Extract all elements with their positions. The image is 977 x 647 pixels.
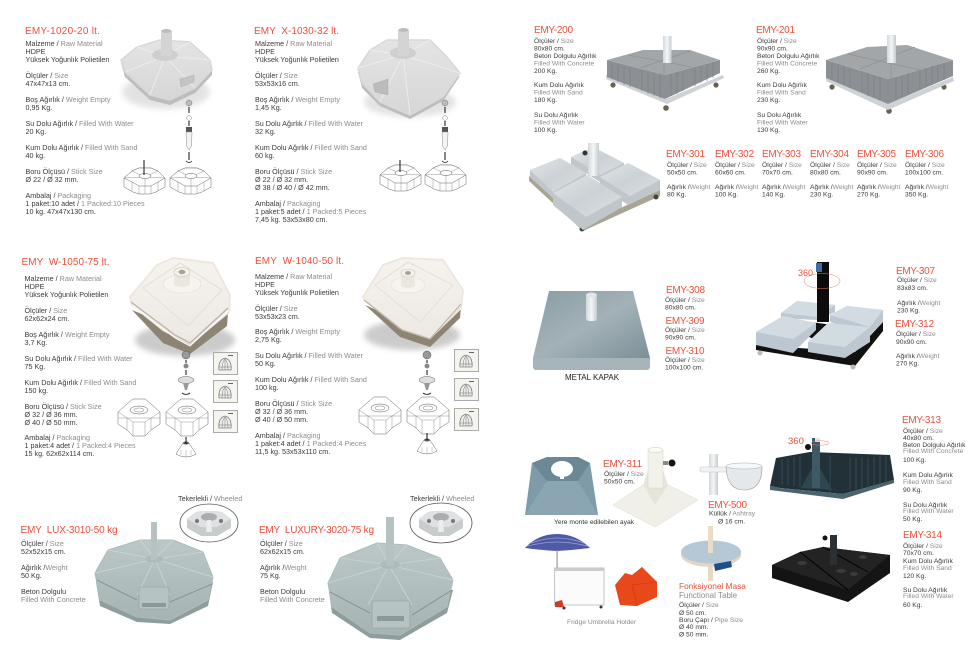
specs: EMY-1020: Malzeme / Raw Material bbox=[26, 39, 103, 48]
EMY-303: Ağırlık /Weight bbox=[762, 184, 806, 191]
specs: EMY-311: 50x50 cm. bbox=[604, 478, 635, 486]
specs: EMY-314: 120 Kg. bbox=[903, 573, 926, 580]
specs: EMY-200: 200 Kg. bbox=[534, 68, 557, 75]
heading: EMY W-1050: EMY W-1050-75 lt. bbox=[22, 257, 110, 268]
EMY-303: Ölçüler / Size bbox=[762, 161, 802, 169]
specs: EMY-307 and EMY-312: EMY-312 bbox=[895, 319, 934, 330]
heading: EMY-200: EMY-200 bbox=[534, 25, 573, 36]
EMY-301: Ağırlık /Weight bbox=[667, 184, 711, 191]
panel: EMY-201 bbox=[756, 25, 954, 134]
specs: EMY-1020: Ambalaj / Packaging bbox=[26, 191, 91, 200]
specs: EMY W-1040: Ø 32 / Ø 36 mm. bbox=[255, 407, 308, 416]
caption: metal cover: METAL KAPAK bbox=[565, 373, 620, 382]
product: floor mount plate bbox=[525, 457, 598, 515]
specs: EMY W-1040: Kum Dolu Ağırlık / Filled With Sand bbox=[255, 375, 367, 384]
specs: EMY-307 and EMY-312: 270 Kg. bbox=[896, 360, 919, 368]
specs: EMY-1020: Yüksek Yoğunlık Polietilen bbox=[26, 55, 109, 64]
specs: EMY-314: 60 Kg. bbox=[903, 602, 922, 609]
specs: EMY-308 to EMY-310: 100x100 cm. bbox=[665, 364, 703, 372]
EMY-302: 100 Kg. bbox=[715, 192, 738, 198]
specs: EMY-313: 50 Kg. bbox=[903, 516, 922, 523]
panel: EMY X-1030 bbox=[254, 26, 466, 224]
specs: EMY X-1030: 53x53x16 cm. bbox=[255, 79, 300, 88]
EMY-305: Ağırlık /Weight bbox=[857, 184, 901, 191]
EMY-305: Ölçüler / Size bbox=[857, 161, 897, 169]
specs: EMY X-1030: Su Dolu Ağırlık / Filled With Water bbox=[255, 119, 364, 128]
callout: wheeled base bbox=[410, 494, 474, 543]
assembly diagram: EMY X-1030 bbox=[380, 100, 466, 191]
EMY-303 bbox=[762, 149, 806, 198]
caption: fridge umbrella holder: Fridge Umbrella Holder bbox=[567, 619, 637, 626]
specs: EMY X-1030: 32 Kg. bbox=[255, 127, 276, 136]
product: metal cover bbox=[533, 291, 650, 370]
specs: EMY X-1030: 1 paket:5 adet / 1 Packed:5 Pieces bbox=[255, 207, 367, 216]
specs: EMY-308 to EMY-310: Ölçüler / Size bbox=[665, 326, 705, 334]
specs: EMY W-1050: Yüksek Yoğunlık Polietilen bbox=[24, 290, 108, 299]
specs: EMY LUX-3010: Filled With Concrete bbox=[21, 595, 86, 604]
product: dark base with side tube and 360 rotation bbox=[770, 436, 894, 499]
specs: EMY-308 to EMY-310: EMY-309 bbox=[666, 316, 705, 327]
specs: functional table: Ø 50 mm. bbox=[679, 632, 708, 638]
product: white base 50 lt bbox=[363, 258, 463, 350]
specs: EMY LUX-3010: Ağırlık /Weight bbox=[21, 563, 68, 572]
EMY-302: Ölçüler / Size bbox=[715, 161, 755, 169]
EMY-304: EMY-304 bbox=[810, 149, 849, 160]
panel: EMY-1020 bbox=[25, 26, 212, 216]
specs: EMY LUXURY-3020: Ölçüler / Size bbox=[260, 539, 303, 548]
EMY-301: EMY-301 bbox=[666, 149, 705, 160]
assembly diagram: EMY W-1050 bbox=[118, 351, 238, 457]
specs: EMY LUXURY-3020: 62x62x15 cm. bbox=[260, 547, 305, 556]
product: orange fridge holder bbox=[615, 567, 657, 606]
specs: EMY W-1040 bbox=[255, 272, 367, 456]
specs: functional table bbox=[679, 581, 746, 638]
callout: wheeled base: Tekerlekli / Wheeled bbox=[410, 494, 474, 503]
specs: EMY X-1030: HDPE bbox=[255, 47, 275, 56]
EMY-306: 350 Kg. bbox=[905, 192, 928, 198]
specs: EMY W-1050: Ambalaj / Packaging bbox=[24, 433, 90, 442]
EMY-302: 60x60 cm. bbox=[715, 170, 746, 176]
specs: EMY X-1030: Ölçüler / Size bbox=[255, 71, 298, 80]
EMY-303: 70x70 cm. bbox=[762, 170, 793, 176]
specs: EMY-307 and EMY-312: 90x90 cm. bbox=[896, 339, 927, 346]
panel: EMY LUX-3010 bbox=[20, 494, 242, 624]
specs: EMY-201: Filled With Sand bbox=[757, 90, 806, 96]
specs: EMY W-1040: 100 kg. bbox=[255, 383, 279, 392]
specs: EMY-201: Ölçüler / Size bbox=[757, 37, 797, 45]
specs: EMY-1020: HDPE bbox=[26, 47, 46, 56]
specs: EMY-313: Filled With Water bbox=[903, 508, 954, 515]
specs: EMY-200: Kum Dolu Ağırlık bbox=[534, 82, 584, 89]
specs: EMY W-1050: Kum Dolu Ağırlık / Filled With Sand bbox=[24, 378, 136, 387]
specs: EMY-1020: Ø 22 / Ø 32 mm. bbox=[26, 175, 79, 184]
specs: EMY-313: EMY-313 bbox=[902, 415, 941, 426]
specs: EMY-201: Su Dolu Ağırlık bbox=[757, 112, 802, 119]
specs: EMY LUX-3010: Beton Dolgulu bbox=[21, 587, 66, 596]
product: black base bbox=[772, 535, 890, 602]
EMY-305 bbox=[857, 149, 901, 198]
specs: EMY-313: Su Dolu Ağırlık bbox=[903, 502, 948, 509]
assembly diagram: EMY-1020 bbox=[124, 100, 211, 194]
EMY-304: 230 Kg. bbox=[810, 192, 833, 198]
specs: functional table: Boru Çapı / Pipe Size bbox=[679, 617, 743, 624]
specs: EMY-201: 260 Kg. bbox=[757, 68, 780, 75]
specs: EMY W-1040: Su Dolu Ağırlık / Filled With Water bbox=[255, 351, 364, 360]
EMY-306: Ağırlık /Weight bbox=[905, 184, 949, 191]
specs: EMY-307 and EMY-312: Ölçüler / Size bbox=[897, 276, 937, 284]
spec columns: EMY-301 to EMY-306 bbox=[666, 149, 949, 198]
product: dark base with side tube and 360 rotation: 360 bbox=[788, 436, 804, 447]
product: grey base on wheeled frame bbox=[606, 36, 724, 111]
EMY-303: 140 Kg. bbox=[762, 192, 785, 198]
EMY-302: Ağırlık /Weight bbox=[715, 184, 759, 191]
specs: EMY-500: EMY-500 bbox=[708, 500, 747, 511]
specs: EMY-308 to EMY-310: 80x80 cm. bbox=[665, 304, 696, 312]
panel: EMY W-1040 bbox=[255, 256, 478, 456]
specs: EMY W-1050: Ø 40 / Ø 50 mm. bbox=[24, 418, 78, 427]
specs: EMY-314: Filled With Sand bbox=[903, 565, 952, 572]
specs: EMY-307 and EMY-312 bbox=[895, 266, 941, 368]
specs: EMY-311 bbox=[603, 459, 644, 486]
specs: EMY-500: Ø 16 cm. bbox=[718, 518, 745, 526]
specs: functional table: Ölçüler / Size bbox=[679, 601, 719, 609]
specs: EMY X-1030: 60 kg. bbox=[255, 151, 275, 160]
specs: EMY X-1030: Kum Dolu Ağırlık / Filled With Sand bbox=[255, 143, 367, 152]
specs: EMY-313: Filled With Concrete bbox=[903, 448, 963, 455]
specs: EMY-308 to EMY-310: EMY-308 bbox=[666, 285, 705, 296]
callout: wheeled base: Tekerlekli / Wheeled bbox=[178, 494, 242, 503]
specs: EMY-200: Ölçüler / Size bbox=[534, 37, 574, 45]
specs: EMY X-1030: Malzeme / Raw Material bbox=[255, 39, 332, 48]
specs: EMY-1020: 10 kg. 47x47x130 cm. bbox=[26, 207, 96, 216]
specs: EMY-1020: 20 Kg. bbox=[26, 127, 46, 136]
specs: EMY W-1050: 75 Kg. bbox=[24, 362, 45, 371]
specs: EMY-307 and EMY-312: EMY-307 bbox=[896, 266, 935, 277]
EMY-302: EMY-302 bbox=[715, 149, 754, 160]
specs: EMY-308 to EMY-310: EMY-310 bbox=[666, 346, 705, 357]
EMY-305: 270 Kg. bbox=[857, 192, 880, 198]
specs: EMY X-1030: Ø 22 / Ø 32 mm. bbox=[255, 175, 308, 184]
EMY-306 bbox=[905, 149, 949, 198]
specs: EMY W-1040: 50 Kg. bbox=[255, 359, 276, 368]
specs: EMY-201: Filled With Water bbox=[757, 120, 808, 126]
specs: EMY LUX-3010: 52x52x15 cm. bbox=[21, 547, 66, 556]
specs: EMY-200: 180 Kg. bbox=[534, 97, 557, 104]
specs: EMY-314: 70x70 cm. bbox=[903, 550, 934, 557]
product: plastic octagonal base 20 lt bbox=[121, 29, 212, 109]
specs: EMY-307 and EMY-312: 230 Kg. bbox=[897, 308, 920, 314]
specs: EMY LUX-3010 bbox=[21, 539, 86, 604]
caption: floor mount: Yere monte edilebilen ayak bbox=[554, 519, 635, 526]
specs: EMY W-1040: HDPE bbox=[255, 280, 275, 289]
product: concrete base 50 kg bbox=[95, 522, 213, 624]
specs: EMY-314: EMY-314 bbox=[903, 530, 942, 541]
specs: EMY-313: Kum Dolu Ağırlık bbox=[903, 472, 953, 479]
specs: EMY-1020: Boş Ağırlık / Weight Empty bbox=[26, 95, 111, 104]
specs: EMY X-1030: 7,45 kg. 53x53x80 cm. bbox=[255, 215, 327, 224]
specs: EMY W-1040: 11,5 kg. 53x53x110 cm. bbox=[255, 447, 330, 456]
EMY-306: EMY-306 bbox=[905, 149, 944, 160]
specs: EMY-201: Beton Dolgulu Ağırlık bbox=[757, 53, 820, 60]
EMY-304 bbox=[810, 149, 854, 198]
specs: EMY-1020: Ölçüler / Size bbox=[26, 71, 68, 80]
specs: EMY W-1050: Boru Ölçüsü / Stick Size bbox=[24, 402, 102, 411]
specs: EMY-1020: 40 kg. bbox=[26, 151, 45, 160]
product: concrete base 75 kg bbox=[328, 517, 453, 640]
EMY-303: EMY-303 bbox=[762, 149, 801, 160]
EMY-305: EMY-305 bbox=[857, 149, 896, 160]
heading: EMY W-1040: EMY W-1040-50 lt. bbox=[255, 256, 344, 267]
specs: EMY-313: Beton Dolgulu Ağırlık bbox=[903, 442, 966, 449]
specs: EMY-311: Ölçüler / Size bbox=[604, 470, 644, 478]
specs: EMY W-1040: Malzeme / Raw Material bbox=[255, 272, 332, 281]
EMY-301: 50x50 cm. bbox=[667, 170, 698, 176]
specs: EMY W-1050: 3,7 Kg. bbox=[24, 338, 47, 347]
EMY-302 bbox=[715, 149, 759, 198]
specs: EMY X-1030: Ø 38 / Ø 40 / Ø 42 mm. bbox=[255, 183, 330, 192]
specs: EMY W-1050 bbox=[24, 274, 136, 458]
EMY-301: 80 Kg. bbox=[667, 192, 686, 198]
specs: EMY-1020 bbox=[26, 39, 145, 216]
heading: EMY-201: EMY-201 bbox=[756, 25, 795, 36]
specs: EMY W-1040: 53x53x23 cm. bbox=[255, 312, 300, 321]
specs: EMY X-1030: Boru Ölçüsü / Stick Size bbox=[255, 167, 332, 176]
product: marble base with black post and 360 rotation: 360 bbox=[798, 268, 813, 278]
specs: functional table: Ø 50 cm. bbox=[679, 610, 706, 617]
specs: EMY-500: Küllük / Ashtray bbox=[709, 510, 756, 518]
specs: EMY-200: 100 Kg. bbox=[534, 127, 557, 134]
specs: EMY-308 to EMY-310 bbox=[665, 285, 705, 372]
specs: EMY-200: Filled With Water bbox=[534, 120, 585, 126]
specs: EMY W-1050: 62x62x24 cm. bbox=[24, 314, 69, 323]
specs: EMY-313: Ölçüler / Size bbox=[903, 427, 943, 435]
product: grey base on wheeled frame, large bbox=[826, 35, 954, 114]
specs: EMY-308 to EMY-310: Ölçüler / Size bbox=[665, 356, 705, 364]
specs: EMY-313 bbox=[902, 415, 966, 523]
specs: EMY-1020: Boru Ölçüsü / Stick Size bbox=[26, 167, 103, 176]
specs: functional table: Fonksiyonel Masa bbox=[679, 581, 746, 591]
specs: EMY-1020: 1 paket:10 adet / 1 Packed:10 Pieces bbox=[26, 199, 145, 208]
specs: EMY-200: 80x80 cm. bbox=[534, 46, 565, 52]
specs: EMY-308 to EMY-310: Ölçüler / Size bbox=[665, 296, 705, 304]
product: white tube stand bbox=[613, 448, 698, 527]
panel: EMY LUXURY-3020 bbox=[259, 494, 474, 640]
specs: EMY LUX-3010: 50 Kg. bbox=[21, 571, 42, 580]
specs: EMY LUX-3010: Ölçüler / Size bbox=[21, 539, 64, 548]
specs: EMY-1020: Kum Dolu Ağırlık / Filled With Sand bbox=[26, 143, 137, 152]
specs: EMY-200: Su Dolu Ağırlık bbox=[534, 112, 579, 119]
specs: EMY-200: Filled With Concrete bbox=[534, 60, 594, 68]
specs: EMY-1020: 0,95 Kg. bbox=[26, 103, 52, 112]
specs: EMY-201: Filled With Concrete bbox=[757, 60, 817, 68]
specs: EMY-1020: 47x47x13 cm. bbox=[26, 79, 70, 88]
specs: EMY-313: 90 Kg. bbox=[903, 487, 922, 494]
product: plastic octagonal base 32 lt bbox=[358, 28, 460, 119]
specs: EMY X-1030: Yüksek Yoğunlık Polietilen bbox=[255, 55, 339, 64]
specs: EMY-307 and EMY-312: Ağırlık /Weight bbox=[896, 353, 940, 360]
heading: EMY-1020: EMY-1020-20 lt. bbox=[25, 26, 100, 37]
specs: EMY X-1030 bbox=[255, 39, 367, 224]
specs: EMY W-1040: Boru Ölçüsü / Stick Size bbox=[255, 399, 332, 408]
specs: EMY W-1050: HDPE bbox=[24, 282, 45, 291]
specs: EMY-200: Beton Dolgulu Ağırlık bbox=[534, 53, 597, 60]
specs: functional table: Functional Table bbox=[679, 591, 738, 600]
specs: EMY W-1040: Ölçüler / Size bbox=[255, 304, 298, 313]
specs: EMY W-1050: Malzeme / Raw Material bbox=[24, 274, 102, 283]
product: marble base on frame bbox=[529, 143, 660, 232]
product: white base 75 lt bbox=[130, 258, 235, 356]
specs: EMY W-1050: 1 paket:4 adet / 1 Packed:4 Pieces bbox=[24, 441, 136, 450]
assembly diagram: EMY W-1040 bbox=[359, 350, 478, 454]
specs: EMY-313: 40x80 cm. bbox=[903, 435, 934, 442]
EMY-305: 90x90 cm. bbox=[857, 170, 888, 176]
callout: wheeled base bbox=[178, 494, 242, 542]
specs: EMY-307 and EMY-312: 83x83 cm. bbox=[897, 285, 928, 292]
specs: EMY-201: 230 Kg. bbox=[757, 97, 780, 104]
panel: EMY W-1050 bbox=[22, 257, 238, 458]
specs: EMY W-1050: 150 kg. bbox=[24, 386, 48, 395]
specs: EMY-314: Su Dolu Ağırlık bbox=[903, 587, 948, 594]
specs: EMY LUXURY-3020 bbox=[260, 539, 325, 604]
specs: functional table: Ø 40 mm. bbox=[679, 624, 708, 631]
specs: EMY-314: Filled With Water bbox=[903, 593, 954, 600]
panel: EMY-200 bbox=[534, 25, 724, 134]
specs: EMY-307 and EMY-312: Ölçüler / Size bbox=[896, 330, 936, 338]
product: functional table bbox=[681, 526, 741, 581]
specs: EMY W-1040: Yüksek Yoğunlık Polietilen bbox=[255, 288, 339, 297]
product: marble base with black post and 360 rotation bbox=[756, 262, 883, 370]
specs: EMY-314: Kum Dolu Ağırlık bbox=[903, 558, 953, 565]
specs: EMY LUXURY-3020: Beton Dolgulu bbox=[260, 587, 305, 596]
specs: EMY-311: EMY-311 bbox=[603, 459, 642, 470]
specs: EMY W-1050: Ø 32 / Ø 36 mm. bbox=[24, 410, 78, 419]
EMY-304: Ölçüler / Size bbox=[810, 161, 850, 169]
EMY-304: 80x80 cm. bbox=[810, 170, 841, 176]
specs: EMY W-1040: Ø 40 / Ø 50 mm. bbox=[255, 415, 308, 424]
specs: EMY-200 bbox=[534, 37, 597, 134]
specs: EMY W-1040: 2,75 Kg. bbox=[255, 335, 282, 344]
specs: EMY-201: 130 Kg. bbox=[757, 127, 780, 134]
specs: EMY W-1050: Boş Ağırlık / Weight Empty bbox=[24, 330, 110, 339]
specs: EMY-308 to EMY-310: 90x90 cm. bbox=[665, 334, 696, 342]
specs: EMY W-1040: 1 paket:4 adet / 1 Packed:4 Pieces bbox=[255, 439, 367, 448]
specs: EMY-313: Filled With Sand bbox=[903, 479, 952, 486]
EMY-301: Ölçüler / Size bbox=[667, 161, 707, 169]
specs: EMY W-1050: 15 kg. 62x62x114 cm. bbox=[24, 449, 94, 458]
specs: EMY-1020: Su Dolu Ağırlık / Filled With Water bbox=[26, 119, 134, 128]
specs: EMY LUXURY-3020: Ağırlık /Weight bbox=[260, 563, 307, 572]
specs: EMY X-1030: Ambalaj / Packaging bbox=[255, 199, 321, 208]
specs: EMY X-1030: Boş Ağırlık / Weight Empty bbox=[255, 95, 340, 104]
EMY-306: 100x100 cm. bbox=[905, 170, 943, 176]
EMY-304: Ağırlık /Weight bbox=[810, 184, 854, 191]
specs: EMY W-1050: Ölçüler / Size bbox=[24, 306, 67, 315]
specs: EMY-200: Filled With Sand bbox=[534, 90, 583, 96]
EMY-301 bbox=[666, 149, 711, 198]
specs: EMY W-1040: Boş Ağırlık / Weight Empty bbox=[255, 327, 340, 336]
heading: EMY LUXURY-3020: EMY LUXURY-3020-75 kg bbox=[259, 525, 374, 536]
specs: EMY-201: Kum Dolu Ağırlık bbox=[757, 82, 807, 89]
specs: EMY-314: Ölçüler / Size bbox=[903, 542, 943, 550]
heading: EMY LUX-3010: EMY LUX-3010-50 kg bbox=[20, 525, 118, 536]
specs: EMY W-1040: Ambalaj / Packaging bbox=[255, 431, 321, 440]
heading: EMY X-1030: EMY X-1030-32 lt. bbox=[254, 26, 339, 37]
specs: EMY W-1050: Su Dolu Ağırlık / Filled With Water bbox=[24, 354, 133, 363]
EMY-306: Ölçüler / Size bbox=[905, 161, 945, 169]
specs: EMY X-1030: 1,45 Kg. bbox=[255, 103, 282, 112]
specs: EMY-201: 90x90 cm. bbox=[757, 46, 788, 52]
specs: EMY-313: 100 Kg. bbox=[903, 457, 926, 464]
product: ashtray bbox=[700, 454, 762, 495]
specs: EMY-201 bbox=[757, 37, 820, 134]
specs: EMY-314 bbox=[903, 530, 954, 609]
product: fridge with umbrella bbox=[525, 534, 604, 610]
specs: EMY LUXURY-3020: Filled With Concrete bbox=[260, 595, 325, 604]
specs: EMY-307 and EMY-312: Ağırlık /Weight bbox=[897, 300, 941, 307]
specs: EMY-500 bbox=[708, 500, 756, 526]
specs: EMY LUXURY-3020: 75 Kg. bbox=[260, 571, 281, 580]
